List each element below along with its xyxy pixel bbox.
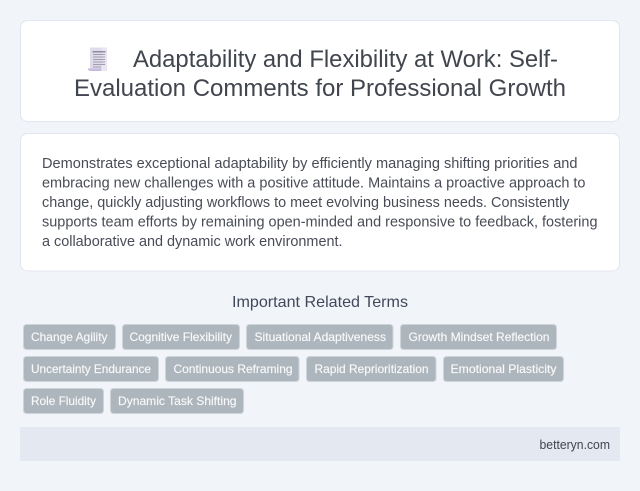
tag: dynamic task shifting [110,388,244,414]
paragraph text: supports team efforts by remaining open-minded and responsive to feedback, fostering [42,214,598,230]
tag: role fluidity: Role Fluidity [31,394,96,408]
tag: change agility: Change Agility [31,330,108,344]
tag: continuous reframing [166,356,299,382]
paragraph text: embracing new challenges with a positive attitude. Maintains a proactive approach to [42,176,586,192]
tag: role fluidity [24,388,104,414]
tag: emotional plasticity [444,356,564,382]
title text: Evaluation Comments for Professional Growth [74,75,566,102]
tag: growth mindset reflection: Growth Mindset Reflection [408,330,550,344]
tag: cognitive flexibility [122,324,240,350]
tag: change agility [24,324,116,350]
tag: emotional plasticity: Emotional Plasticity [450,362,556,376]
tag: cognitive flexibility: Cognitive Flexibility [130,330,232,344]
paragraph text: a collaborative and dynamic work environment. [42,234,342,250]
tag: situational adaptiveness [246,324,393,350]
icon: paper scroll [88,48,107,71]
heading: important related terms: Important Related Terms [232,294,408,311]
title text: Adaptability and Flexibility at Work: Self- [133,46,558,73]
tag: uncertainty endurance [24,356,158,382]
paragraph text [42,156,598,250]
footer source: betteryn.com [540,438,610,452]
panel: self-evaluation comment [20,134,620,271]
tag list [24,324,564,414]
footer bar [20,427,620,461]
tag: rapid reprioritization: Rapid Reprioritization [314,362,428,376]
paragraph text: Demonstrates exceptional adaptability by efficiently managing shifting priorities and [42,156,578,172]
tag: uncertainty endurance: Uncertainty Endurance [31,362,151,376]
tag: situational adaptiveness: Situational Adaptiveness [254,330,386,344]
tag: rapid reprioritization [306,356,436,382]
tag: dynamic task shifting: Dynamic Task Shifting [118,394,236,408]
title text [74,46,566,102]
tag: continuous reframing: Continuous Reframing [174,362,292,376]
tag: growth mindset reflection [400,324,556,350]
paragraph text: change, quickly adjusting workflows to meet evolving business needs. Consistently [42,195,570,211]
panel: title [20,20,620,122]
